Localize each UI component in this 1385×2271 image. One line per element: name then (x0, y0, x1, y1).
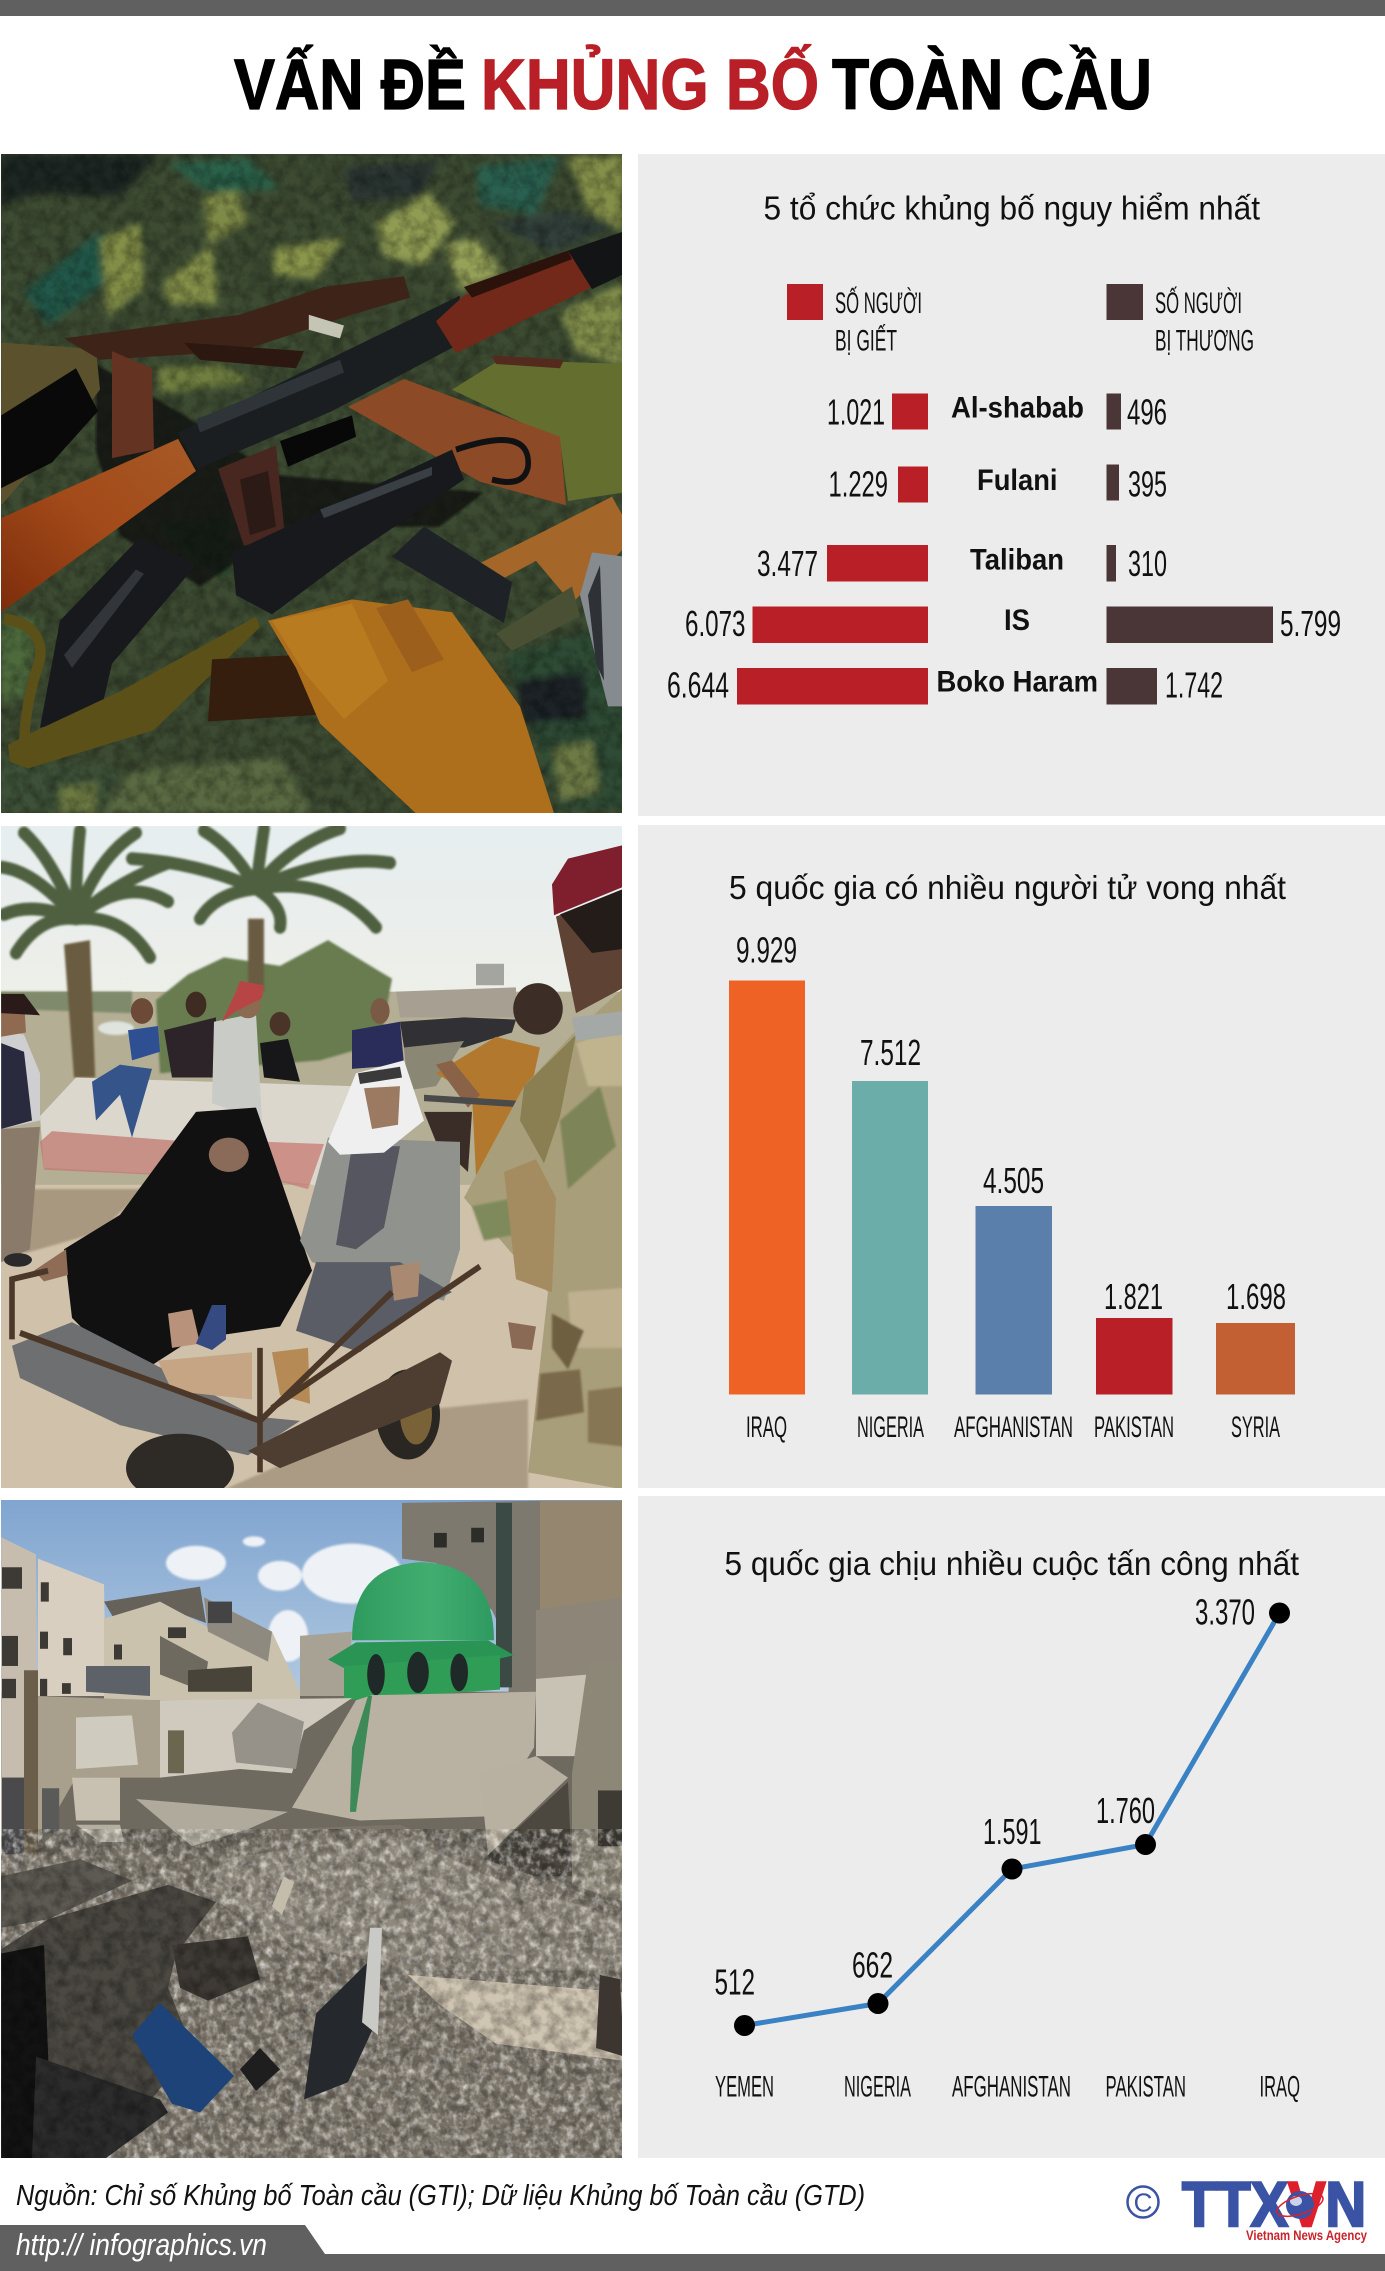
line chart: IRAQ (1260, 2070, 1300, 2104)
row: Taliban: Taliban (970, 544, 1064, 576)
row: Fulani: 1.229 (828, 464, 888, 504)
copyright mark: C (1134, 2188, 1152, 2218)
bar: Syria: 1.698 (1226, 1276, 1286, 1317)
legend: wounded: SỐ NGƯỜI (1155, 286, 1242, 320)
bar: Iraq: IRAQ (746, 1411, 787, 1444)
logo globe (1274, 2189, 1326, 2221)
title: KHỦNG BỐ (481, 45, 819, 125)
bar: Iraq: 9.929 (736, 930, 797, 970)
row: IS: IS (1004, 604, 1030, 637)
line chart: 1.591 (983, 1811, 1042, 1852)
row: Fulani (828, 464, 1167, 504)
panel heading: 5 tổ chức khủng bố nguy hiểm nhất (764, 190, 1260, 226)
bar: Nigeria (852, 1032, 928, 1444)
legend: killed (787, 284, 922, 358)
bar: Iraq (729, 930, 805, 1444)
footer bar with website tab (0, 2225, 1385, 2271)
bar: Pakistan: 1.821 (1104, 1276, 1163, 1317)
row: Taliban: 310 (1128, 543, 1167, 584)
bar: Syria (1216, 1276, 1295, 1444)
row: Fulani: Fulani (977, 464, 1058, 497)
line chart: AFGHANISTAN (952, 2070, 1071, 2104)
line chart: 512 (714, 1962, 755, 2002)
row: Boko Haram (667, 664, 1223, 706)
bar chart (729, 930, 1295, 1444)
bar: Nigeria: NIGERIA (857, 1411, 924, 1444)
row: Taliban: 3.477 (757, 543, 818, 584)
title (234, 45, 1152, 125)
row: IS: 5.799 (1280, 603, 1341, 644)
line chart: NIGERIA (844, 2070, 911, 2104)
photo: destroyed buildings with green dome (0, 1490, 628, 2164)
panel: 5 most dangerous terrorist organisations (638, 154, 1385, 816)
panel heading: 5 quốc gia chịu nhiều cuộc tấn công nhất (724, 1545, 1299, 1582)
row: Boko Haram: 1.742 (1165, 664, 1223, 706)
bar: Syria: SYRIA (1231, 1411, 1280, 1444)
row: Al-shabab: 496 (1127, 392, 1167, 432)
line chart: PAKISTAN (1106, 2070, 1186, 2104)
title: VẤN ĐỀ (234, 46, 466, 125)
panel heading: 5 quốc gia có nhiều người tử vong nhất (729, 869, 1286, 906)
source note: Nguồn: Chỉ số Khủng bố Toàn cầu (GTI); Dữ liệu Khủng bố Toàn cầu (GTD) (16, 2180, 865, 2212)
photo: assault rifles on camouflage (0, 150, 628, 822)
footer bar with website tab: http:// infographics.vn (16, 2227, 267, 2262)
row: IS: 6.073 (685, 603, 746, 644)
legend: killed: SỐ NGƯỜI (835, 286, 922, 320)
top bar (0, 0, 1385, 16)
panel: 5 countries with most attacks (638, 1496, 1385, 2158)
bar: Afghanistan: AFGHANISTAN (954, 1411, 1073, 1444)
bar: Pakistan: PAKISTAN (1094, 1411, 1174, 1444)
line chart: 1.760 (1096, 1790, 1155, 1831)
row: Taliban (757, 543, 1167, 584)
line chart: 3.370 (1195, 1592, 1255, 1632)
legend: wounded: BỊ THƯƠNG (1155, 324, 1254, 358)
row: Boko Haram: Boko Haram (936, 666, 1098, 698)
title: TOÀN CẦU (832, 46, 1152, 125)
bar: Afghanistan: 4.505 (983, 1160, 1044, 1201)
line chart: YEMEN (715, 2070, 774, 2104)
bar: Nigeria: 7.512 (860, 1032, 921, 1073)
panel: 5 countries with most deaths (638, 825, 1385, 1488)
row: Boko Haram: 6.644 (667, 664, 729, 706)
copyright mark (1128, 2186, 1158, 2218)
line chart (714, 1592, 1300, 2104)
row: Al-shabab: Al-shabab (951, 392, 1084, 424)
bar: Pakistan (1094, 1276, 1174, 1444)
legend: wounded (1106, 284, 1254, 358)
line chart: 662 (852, 1944, 893, 1986)
logo: TTXVN: TTXVN (1182, 2170, 1366, 2240)
row: Al-shabab (827, 392, 1167, 432)
row: IS (685, 603, 1341, 644)
bar: Afghanistan (954, 1160, 1073, 1444)
row: Al-shabab: 1.021 (827, 392, 885, 432)
legend: killed: BỊ GIẾT (835, 324, 897, 358)
photo: displaced elderly couple on a cart (0, 820, 628, 1502)
soft shadows under the guns (96, 364, 484, 587)
row: Fulani: 395 (1128, 464, 1167, 504)
left apartment blocks (1, 1537, 38, 1868)
